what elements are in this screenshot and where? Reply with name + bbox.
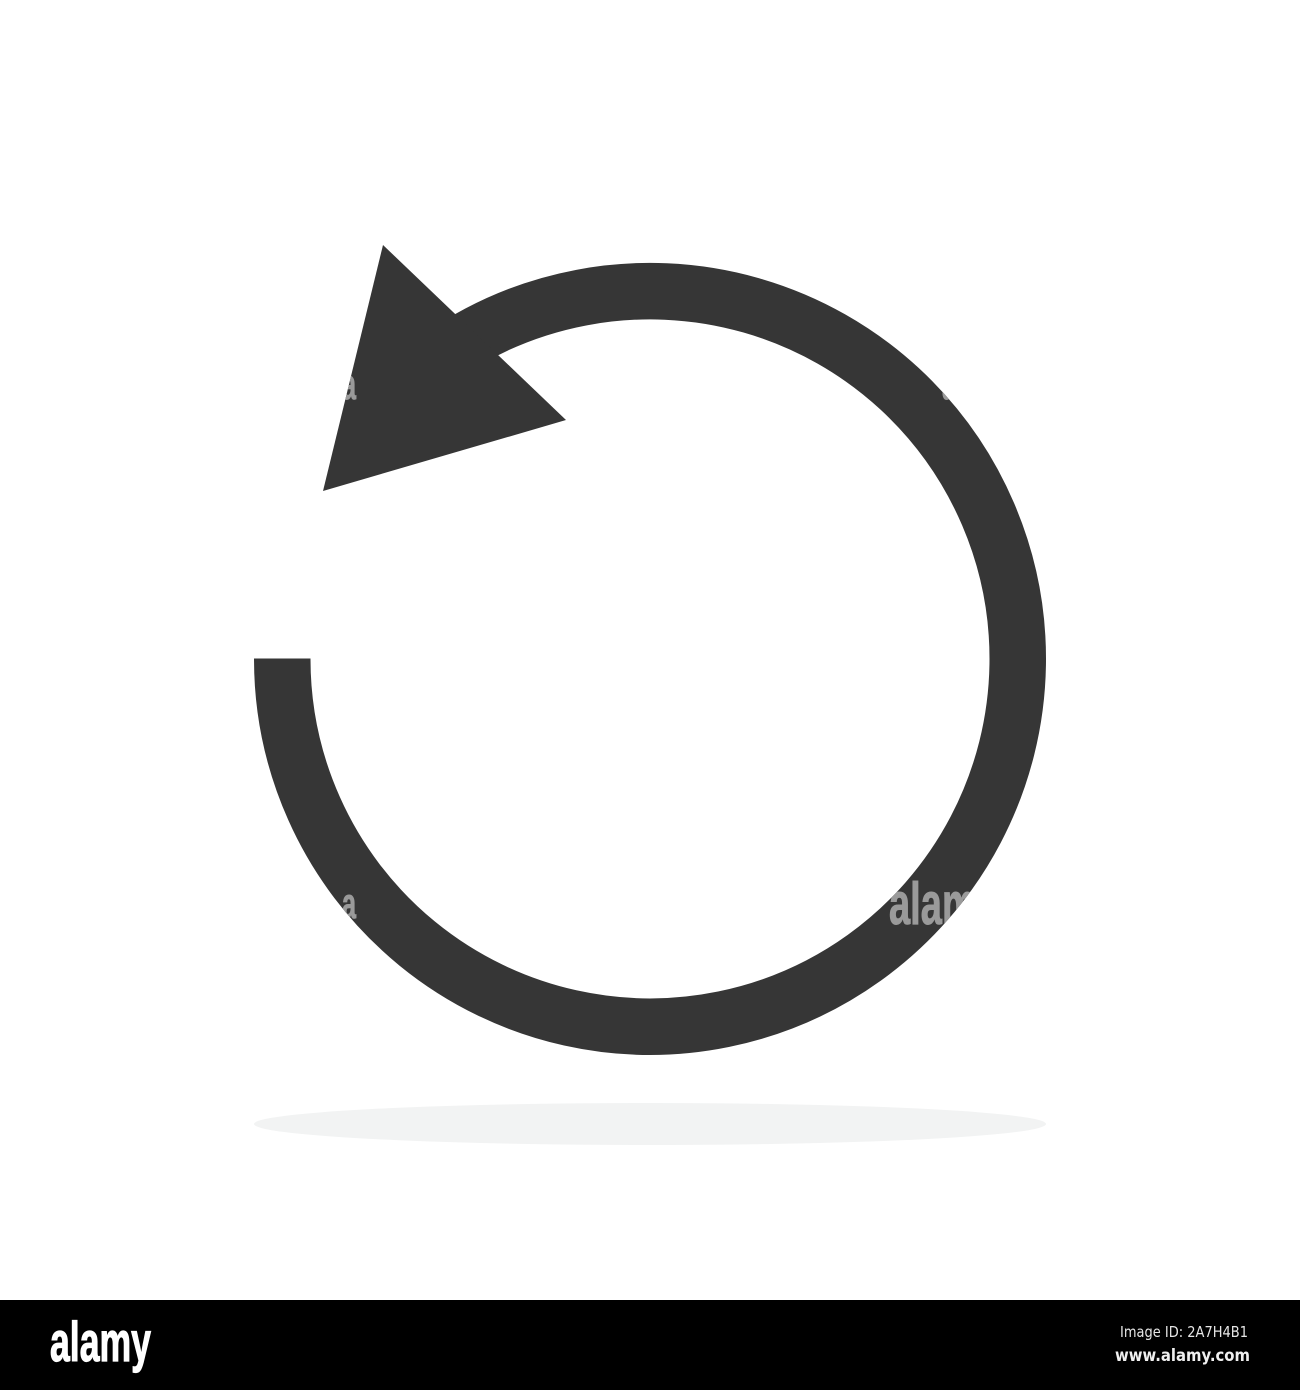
watermark fragments: a xyxy=(342,361,357,409)
website: www.alamy.com xyxy=(1115,1346,1250,1365)
footer bar xyxy=(0,1300,1300,1390)
icon shadow xyxy=(254,1103,1046,1145)
footer logo: alamy xyxy=(50,1310,151,1373)
circular arrow ring xyxy=(282,291,1018,1027)
arrowhead xyxy=(323,245,566,491)
image id: Image ID: 2A7H4B1 xyxy=(1120,1323,1248,1341)
icon: circular arrow xyxy=(282,245,1018,1027)
watermark fragments: a xyxy=(342,880,357,928)
watermark fragments xyxy=(342,361,997,937)
watermark fragments: alamy xyxy=(889,871,997,937)
watermark fragments: a xyxy=(942,361,957,409)
